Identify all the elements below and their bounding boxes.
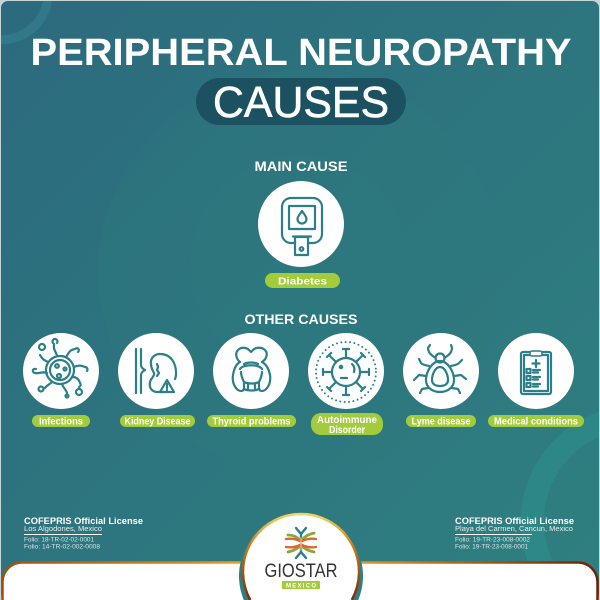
label: autoimmune disorder: [311, 413, 383, 436]
logo emblem: [286, 528, 316, 558]
license: playa del carmen: Playa del Carmen, Cancun, Mexico: [455, 526, 573, 533]
label: medical conditions: Medical conditions: [494, 416, 578, 428]
icon: infections: [23, 333, 99, 409]
license: los algodones: COFEPRIS Official License: [24, 516, 143, 527]
label: autoimmune disorder: Autoimmune: [317, 415, 377, 426]
logo badge: [239, 514, 363, 600]
heading: main cause: MAIN CAUSE: [254, 158, 348, 174]
title pill: causes: CAUSES: [213, 78, 389, 127]
label: diabetes: [265, 273, 340, 288]
icon: lyme disease tick: [403, 333, 479, 409]
label: kidney disease: Kidney Disease: [124, 416, 191, 428]
title: PERIPHERAL NEUROPATHY: [30, 32, 572, 74]
label: autoimmune disorder: Disorder: [329, 425, 365, 436]
icon: medical conditions clipboard: [498, 333, 574, 409]
icon: thyroid: [213, 333, 289, 409]
license: los algodones: Folio: 18-TR-02-02-0001: [24, 536, 95, 544]
label: infections: Infections: [39, 416, 83, 428]
license: playa del carmen: [455, 516, 574, 550]
license: playa del carmen: COFEPRIS Official License: [455, 516, 574, 527]
icon: kidney disease: [118, 333, 194, 409]
label: thyroid problems: Thyroid problems: [212, 416, 291, 428]
license: los algodones: Folio: 14-TR-02-002-0008: [24, 544, 101, 550]
icon: glucose meter: [258, 181, 344, 267]
label: diabetes: Diabetes: [278, 276, 328, 288]
label: lyme disease: Lyme disease: [412, 416, 471, 428]
license: los algodones: [24, 516, 143, 550]
footer white panel: [2, 562, 598, 600]
logo badge: MEXICO: [286, 584, 316, 590]
license: playa del carmen: Folio: 19-TR-23-008-0001: [455, 544, 528, 550]
license: los algodones: Los Algodones, Mexico: [24, 526, 102, 533]
license: playa del carmen: Folio: 19-TR-23-008-0002: [455, 536, 531, 544]
icon: autoimmune disorder: [308, 333, 384, 409]
heading: other causes: OTHER CAUSES: [244, 311, 358, 327]
logo badge: GIOSTAR: [264, 561, 338, 582]
